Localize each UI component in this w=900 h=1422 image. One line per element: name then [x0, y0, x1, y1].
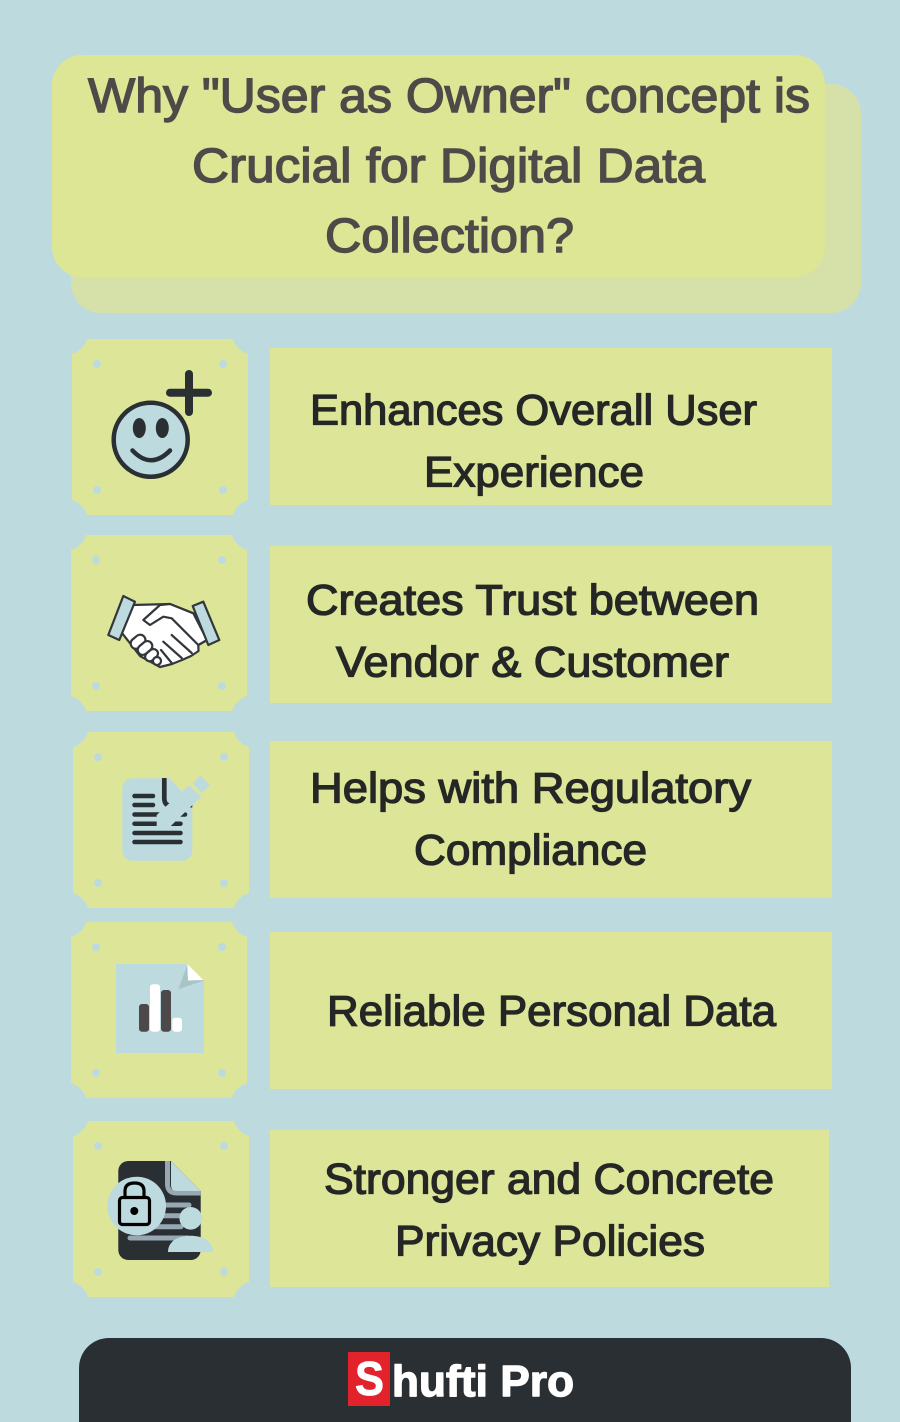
text bar 3	[270, 741, 832, 898]
panel: title card	[52, 55, 861, 313]
heading: Why "User as Owner" concept is	[88, 70, 810, 123]
icon: document with pencil	[122, 775, 210, 861]
logo: Shufti Pro: S	[355, 1353, 384, 1406]
row 1: enhances user experience	[72, 339, 832, 515]
row 5: privacy policies	[73, 1121, 829, 1297]
text bar 3: Helps with Regulatory	[310, 764, 752, 812]
icon tile 4	[71, 922, 247, 1098]
text bar 5: Privacy Policies	[395, 1218, 705, 1266]
text bar 1	[270, 348, 832, 505]
icon: smiley with plus	[114, 374, 208, 477]
text bar 5	[270, 1130, 829, 1287]
icon: handshake	[108, 596, 219, 667]
row 2: creates trust	[71, 535, 832, 711]
icon: bar chart page	[116, 964, 204, 1053]
logo: Shufti Pro: hufti Pro	[392, 1357, 574, 1406]
text bar 1: Enhances Overall User	[310, 386, 757, 434]
text bar 2	[270, 546, 832, 703]
heading	[88, 70, 810, 263]
row 3: regulatory compliance	[73, 732, 832, 908]
heading: Crucial for Digital Data	[192, 140, 705, 193]
heading: Collection?	[325, 210, 574, 263]
row 4: reliable data	[71, 922, 832, 1098]
text bar 4: Reliable Personal Data	[327, 988, 776, 1036]
text bar 2: Vendor & Customer	[336, 638, 729, 686]
icon tile 3	[73, 732, 249, 908]
icon tile 1	[72, 339, 248, 515]
icon tile 5	[73, 1121, 249, 1297]
text bar 3: Compliance	[414, 826, 647, 874]
text bar 5: Stronger and Concrete	[324, 1156, 774, 1204]
icon: locked document with person	[107, 1161, 213, 1260]
text bar 2: Creates Trust between	[306, 576, 759, 624]
footer bar	[79, 1338, 851, 1422]
text bar 4	[270, 932, 832, 1089]
text bar 1: Experience	[424, 448, 644, 496]
icon tile 2	[71, 535, 247, 711]
